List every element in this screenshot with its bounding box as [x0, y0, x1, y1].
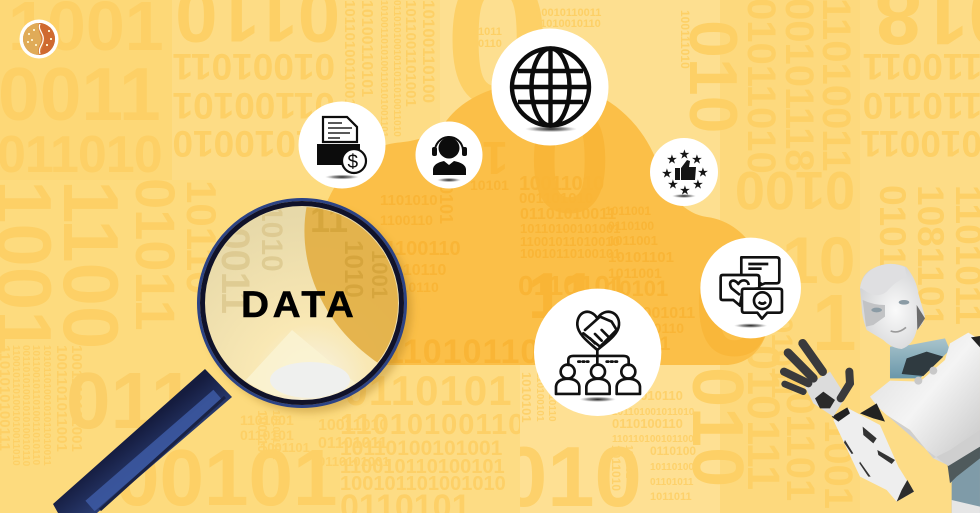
infographic canvas: 10110100 [650, 462, 694, 473]
binary digit pattern: 0011 [0, 52, 161, 136]
infographic canvas: 01101011 [650, 477, 694, 488]
binary digit pattern: 0101101 [872, 185, 913, 327]
binary digit pattern: 010111 [738, 345, 789, 490]
cloud digit pattern: 1101010 [380, 192, 438, 209]
binary digit pattern: 110110 [863, 85, 980, 126]
binary digit pattern: 1011 [478, 26, 502, 38]
cloud digit pattern: 1010110 [385, 262, 447, 279]
icon: thumbs up with stars [650, 138, 718, 206]
icon: thumbs up with stars: ★ [693, 179, 703, 191]
bottom band digits: 11010100110 [340, 409, 525, 441]
binary digit pattern: 10011010 [318, 417, 388, 434]
right side: 010 [675, 20, 751, 133]
lens rim [198, 200, 406, 406]
binary digit pattern: 0110 [478, 38, 502, 50]
binary digit pattern: 0110101 [240, 427, 294, 443]
binary digit pattern: 101101 [778, 370, 822, 501]
binary digit pattern: 1010 [260, 358, 304, 380]
cloud digit pattern: 0011010110 [345, 333, 540, 371]
lens: 1001 [367, 250, 392, 299]
robot neck [890, 338, 950, 378]
icon: folder with dollar [298, 102, 386, 188]
binary digit pattern: 0110101001 [318, 454, 390, 469]
icon: folder with dollar: $ [348, 152, 358, 173]
icon: chat bubbles [700, 238, 801, 338]
cloud digit pattern: 110101 [436, 165, 456, 224]
robot hand [805, 372, 846, 417]
cloud digit pattern: 101 [431, 132, 508, 184]
binary digit pattern: 101011 [765, 300, 798, 398]
cloud digit pattern: 10110100101001 [520, 221, 621, 236]
cloud digit pattern: 11 [528, 259, 597, 332]
cloud digit pattern: 10101 [607, 276, 668, 301]
infographic canvas: 010010110 [546, 372, 557, 422]
cloud digit pattern: 0101001011 [607, 305, 695, 322]
infographic canvas: 110100101 [534, 372, 545, 422]
binary digit pattern: 01011010 [739, 0, 783, 174]
robot forearm [833, 408, 914, 502]
cloud digit pattern: 0 [693, 219, 776, 387]
binary digit pattern: 1100 [47, 180, 135, 349]
cloud digit pattern: 1010010110 [607, 320, 684, 336]
binary digit pattern: 1010110100101011010011 [41, 345, 52, 466]
lens: 10011 [213, 205, 257, 314]
binary digit pattern: 1011010011001 [341, 0, 358, 107]
infographic canvas: 110110100101100 [612, 434, 694, 445]
binary digit pattern: 101001101 [270, 410, 281, 460]
bottom band digits: 110010110100101 [340, 456, 505, 478]
binary digit pattern: 01101011 [318, 435, 388, 452]
icon: thumbs up with stars: ★ [680, 185, 690, 197]
binary digit pattern: 1 [812, 278, 856, 367]
lens: 1010 [339, 240, 369, 298]
infographic canvas: 0110100110 [612, 416, 683, 431]
binary digit pattern: 011 [66, 356, 195, 445]
binary digit pattern: 100111010 [678, 10, 692, 69]
binary digit pattern: 1010010110011 [523, 7, 601, 19]
cloud digit pattern: 01101010011 [520, 206, 616, 223]
binary digit pattern: 1011001011010011010110 [30, 345, 41, 466]
binary digit pattern: 01100101 [172, 85, 335, 126]
binary digit pattern: 00101118 [777, 0, 821, 172]
cloud digit pattern [381, 122, 764, 364]
robot abdomen [952, 458, 980, 513]
binary digit pattern: 1001101 [255, 410, 270, 460]
logo badge [20, 20, 58, 58]
robot shoulder joint [860, 403, 885, 422]
binary digit pattern: 1001101011001 [53, 345, 70, 452]
binary digit pattern: 010 [677, 367, 757, 487]
binary digit pattern: 1010011010100110101001101 [378, 0, 389, 138]
magnifying glass [53, 190, 412, 513]
robot torso [870, 333, 980, 465]
bottom band digits: 00110101 [320, 367, 513, 414]
icon: handshake team [534, 289, 661, 416]
cloud digit pattern: 1011001 [608, 265, 662, 281]
cloud digit pattern: 10101 [470, 177, 509, 193]
binary digit pattern: 1001 [816, 420, 860, 509]
robot [784, 264, 980, 513]
binary digit pattern: 11010011 [814, 0, 858, 172]
cloud silhouette [304, 82, 770, 365]
binary digit pattern: 01011 [124, 178, 187, 331]
binary digit pattern: 011010 [0, 126, 162, 184]
cloud digit pattern: 10011010 [519, 173, 604, 195]
binary digit pattern: 1101001 [240, 412, 294, 428]
binary digit pattern: 0011010100101010010110 [20, 345, 31, 467]
cloud digit pattern: 10101101 [608, 249, 674, 266]
bottom band digits [341, 376, 520, 513]
cloud digit pattern: 0 [528, 76, 611, 244]
cloud digit pattern: 1100110 [380, 212, 433, 228]
lens: 11 [310, 199, 348, 240]
infographic canvas: 101101001011010 [612, 407, 695, 418]
binary digit pattern: 10 [782, 223, 855, 297]
bottom band digits: 10110100101001 [340, 437, 503, 460]
infographic canvas: 0110100 [650, 444, 696, 458]
icon: thumbs up with stars: ★ [698, 167, 708, 179]
binary digit pattern: 1081101 [910, 185, 951, 327]
infographic canvas: 1011010 [609, 445, 623, 491]
handle [53, 369, 232, 513]
binary digit pattern: 10110 [178, 180, 225, 294]
cloud digit pattern: 1011001 [608, 233, 658, 248]
lens [205, 206, 399, 400]
cloud digit pattern: 001101010 [519, 190, 593, 207]
robot head [860, 264, 925, 349]
binary digit pattern: 10100110100 [419, 0, 438, 103]
icon: thumbs up with stars: ★ [662, 168, 672, 180]
binary digit pattern: 0110101001011011010011010 [391, 0, 402, 137]
infographic canvas: 1010101 [519, 372, 534, 423]
icon: thumbs up with stars: ★ [667, 154, 677, 166]
cloud digit pattern: 0110100 [608, 219, 654, 233]
lens shadow [204, 205, 412, 413]
binary digit pattern: 0100 [735, 160, 855, 220]
cloud digit pattern: 101001 [607, 334, 671, 355]
cloud digit pattern: 1100110 [385, 238, 461, 260]
cloud digit pattern: 0110101 [518, 270, 625, 301]
DATA label: DATA [241, 285, 357, 326]
infographic canvas: 1011011 [650, 491, 692, 503]
icon: thumbs up with stars: ★ [680, 149, 690, 161]
icon: thumbs up with stars: ★ [692, 154, 702, 166]
bottom band digits: 100101101001010 [340, 473, 506, 495]
cloud digit pattern: 1010110 [385, 279, 439, 295]
infographic canvas: 101001 [623, 445, 634, 479]
binary digit pattern: 010011 [861, 123, 980, 164]
binary digit pattern: 1100101101001010011010 [10, 345, 21, 466]
cloud digit pattern: 1011001 [605, 204, 651, 218]
cloud digit pattern: 10010110100101 [520, 246, 621, 261]
lens: 1010 [255, 205, 288, 272]
binary digit pattern: 1011001101001 [402, 0, 419, 107]
cloud digit pattern: 11001011010010 [520, 234, 620, 249]
binary digit pattern: 10100110101 [358, 0, 375, 97]
binary digit pattern: 1001110101001 [68, 345, 85, 452]
binary digit pattern: 0111010010110 [523, 18, 601, 30]
binary digit pattern: 1001101 [260, 440, 310, 455]
infographic canvas: 0011010110 [612, 388, 683, 403]
binary digit pattern: 110011 [863, 46, 980, 87]
icon: thumbs up with stars: ★ [668, 179, 678, 191]
icon: globe [492, 28, 608, 146]
binary digit pattern: 11010010 [172, 123, 335, 164]
icon: headset agent [416, 122, 482, 188]
binary digit pattern: 01001011 [172, 46, 335, 87]
